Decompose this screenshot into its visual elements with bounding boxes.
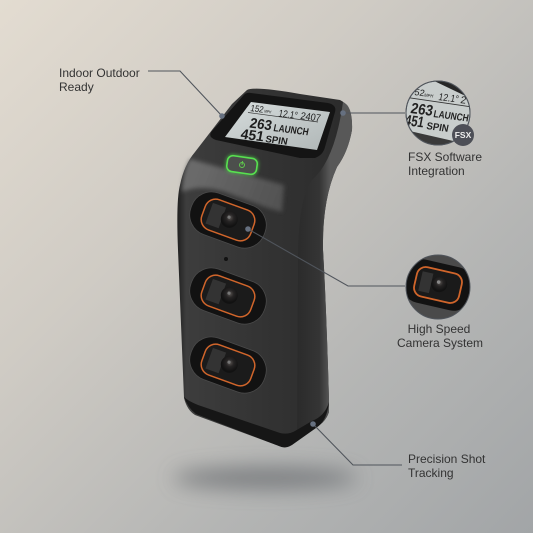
label: FSX Software Integration [408,150,482,178]
detail circle: FSX: 263 [409,100,435,120]
detail circle: FSX: 52 [414,87,426,98]
screen: LAUNCH [272,123,310,138]
detail circle: camera [406,254,470,320]
label: Precision Shot Tracking [408,452,486,480]
detail circle: FSX: MPH [424,93,434,99]
callout line: camera [245,226,405,286]
label: FSX Software Integration: Integration [408,164,465,178]
label: Precision Shot Tracking: Precision Shot [408,452,485,466]
device base [184,397,329,447]
screen: 263 [248,116,273,134]
camera 1 [184,186,272,254]
screen: 2407 [299,111,322,124]
device [177,89,352,448]
screen: SPIN [264,134,289,148]
detail circle: FSX: SPIN [425,121,450,135]
screen bezel [210,93,335,158]
callout line: indoor outdoor [148,71,225,119]
screen: 152 [250,103,265,115]
label: Indoor Outdoor Ready: Indoor Outdoor [59,66,140,80]
detail circle: FSX: 2 [459,95,467,107]
device side panel [297,102,352,441]
label: High Speed Camera System [397,322,483,350]
screen [225,102,330,150]
detail circle: FSX [406,80,474,146]
screen: 451 [239,127,265,145]
detail circle: FSX: LAUNCH [432,109,470,125]
callout line: tracking [310,421,402,465]
device silhouette [177,89,352,448]
screen: MPH [264,109,272,114]
label: FSX Software Integration: FSX Software [408,150,482,164]
microphone dot [224,257,228,261]
label: High Speed Camera System: Camera System [397,336,483,350]
detail circle: FSX: 12.1° [437,92,460,106]
label: High Speed Camera System: High Speed [408,322,470,336]
FSX badge: FSX [455,130,472,140]
callout line: FSX [340,110,405,116]
label: Precision Shot Tracking: Tracking [408,466,454,480]
label: Indoor Outdoor Ready [59,66,140,94]
camera 2 [184,262,272,330]
camera 3 [184,331,272,399]
ground shadow [173,467,357,489]
sheen [182,159,284,212]
screen: 12.1° [277,109,299,122]
detail circle: FSX: 451 [403,112,426,131]
power button [226,155,258,175]
label: Indoor Outdoor Ready: Ready [59,80,94,94]
